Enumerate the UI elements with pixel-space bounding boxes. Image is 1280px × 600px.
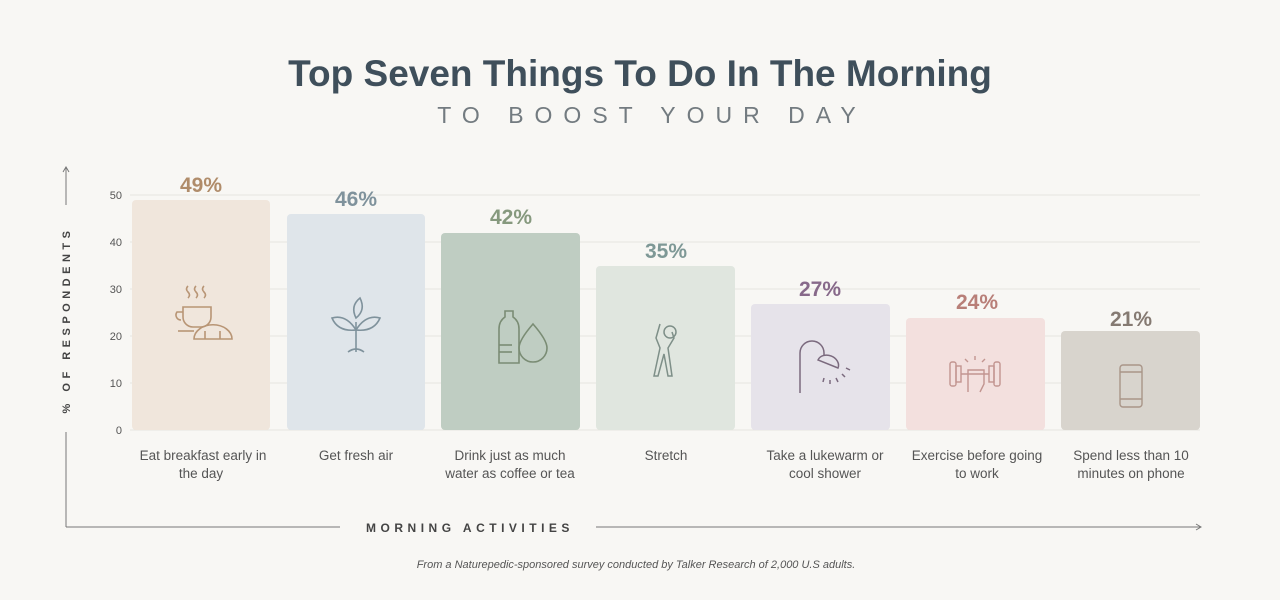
bar 4: stretch bbox=[596, 240, 735, 463]
bar 6: exercise: to work bbox=[955, 466, 999, 481]
bar 1: breakfast bbox=[132, 174, 270, 481]
bar 1: breakfast: 49% bbox=[180, 174, 222, 197]
bar 7: phone bbox=[1061, 308, 1200, 481]
y axis bbox=[63, 167, 1201, 530]
bar 3: water: Drink just as much bbox=[454, 448, 566, 463]
bar 1: breakfast: the day bbox=[179, 466, 223, 481]
bar 5: shower: Take a lukewarm or bbox=[766, 448, 884, 463]
bar 7: phone: minutes on phone bbox=[1077, 466, 1185, 481]
y axis tick labels bbox=[110, 190, 122, 437]
bar 3: water bbox=[441, 206, 580, 481]
footnote: From a Naturepedic-sponsored survey conducted by Talker Research of 2,000 U.S adults. bbox=[417, 559, 855, 571]
y axis tick labels: 50 bbox=[110, 190, 122, 202]
y axis tick labels: 30 bbox=[110, 284, 122, 296]
bar 7: phone: 21% bbox=[1110, 308, 1152, 331]
bar 5: shower: cool shower bbox=[789, 466, 862, 481]
y axis tick labels: 10 bbox=[110, 378, 122, 390]
y axis tick labels: 20 bbox=[110, 331, 122, 343]
bar 3: water: water as coffee or tea bbox=[444, 466, 575, 481]
bar 7: phone: Spend less than 10 bbox=[1073, 448, 1189, 463]
y axis title: % OF RESPONDENTS bbox=[61, 227, 73, 413]
y axis tick labels: 40 bbox=[110, 237, 122, 249]
x axis title: MORNING ACTIVITIES bbox=[366, 521, 574, 535]
title: Top Seven Things To Do In The Morning bbox=[288, 53, 992, 94]
bar 4: stretch: 35% bbox=[645, 240, 687, 263]
y axis tick labels: 0 bbox=[116, 425, 122, 437]
bar 2: fresh air bbox=[287, 188, 425, 463]
bar 2: fresh air: Get fresh air bbox=[319, 448, 394, 463]
bar 6: exercise: 24% bbox=[956, 291, 998, 314]
bar 3: water: 42% bbox=[490, 206, 532, 229]
bar 1: breakfast: Eat breakfast early in bbox=[140, 448, 266, 463]
bar 5: shower: 27% bbox=[799, 278, 841, 301]
bar 6: exercise: Exercise before going bbox=[912, 448, 1042, 463]
bar 5: shower bbox=[751, 278, 890, 481]
subtitle: TO BOOST YOUR DAY bbox=[437, 102, 867, 128]
bar 2: fresh air: 46% bbox=[335, 188, 377, 211]
bar 4: stretch: Stretch bbox=[645, 448, 687, 463]
bar 6: exercise bbox=[906, 291, 1045, 481]
